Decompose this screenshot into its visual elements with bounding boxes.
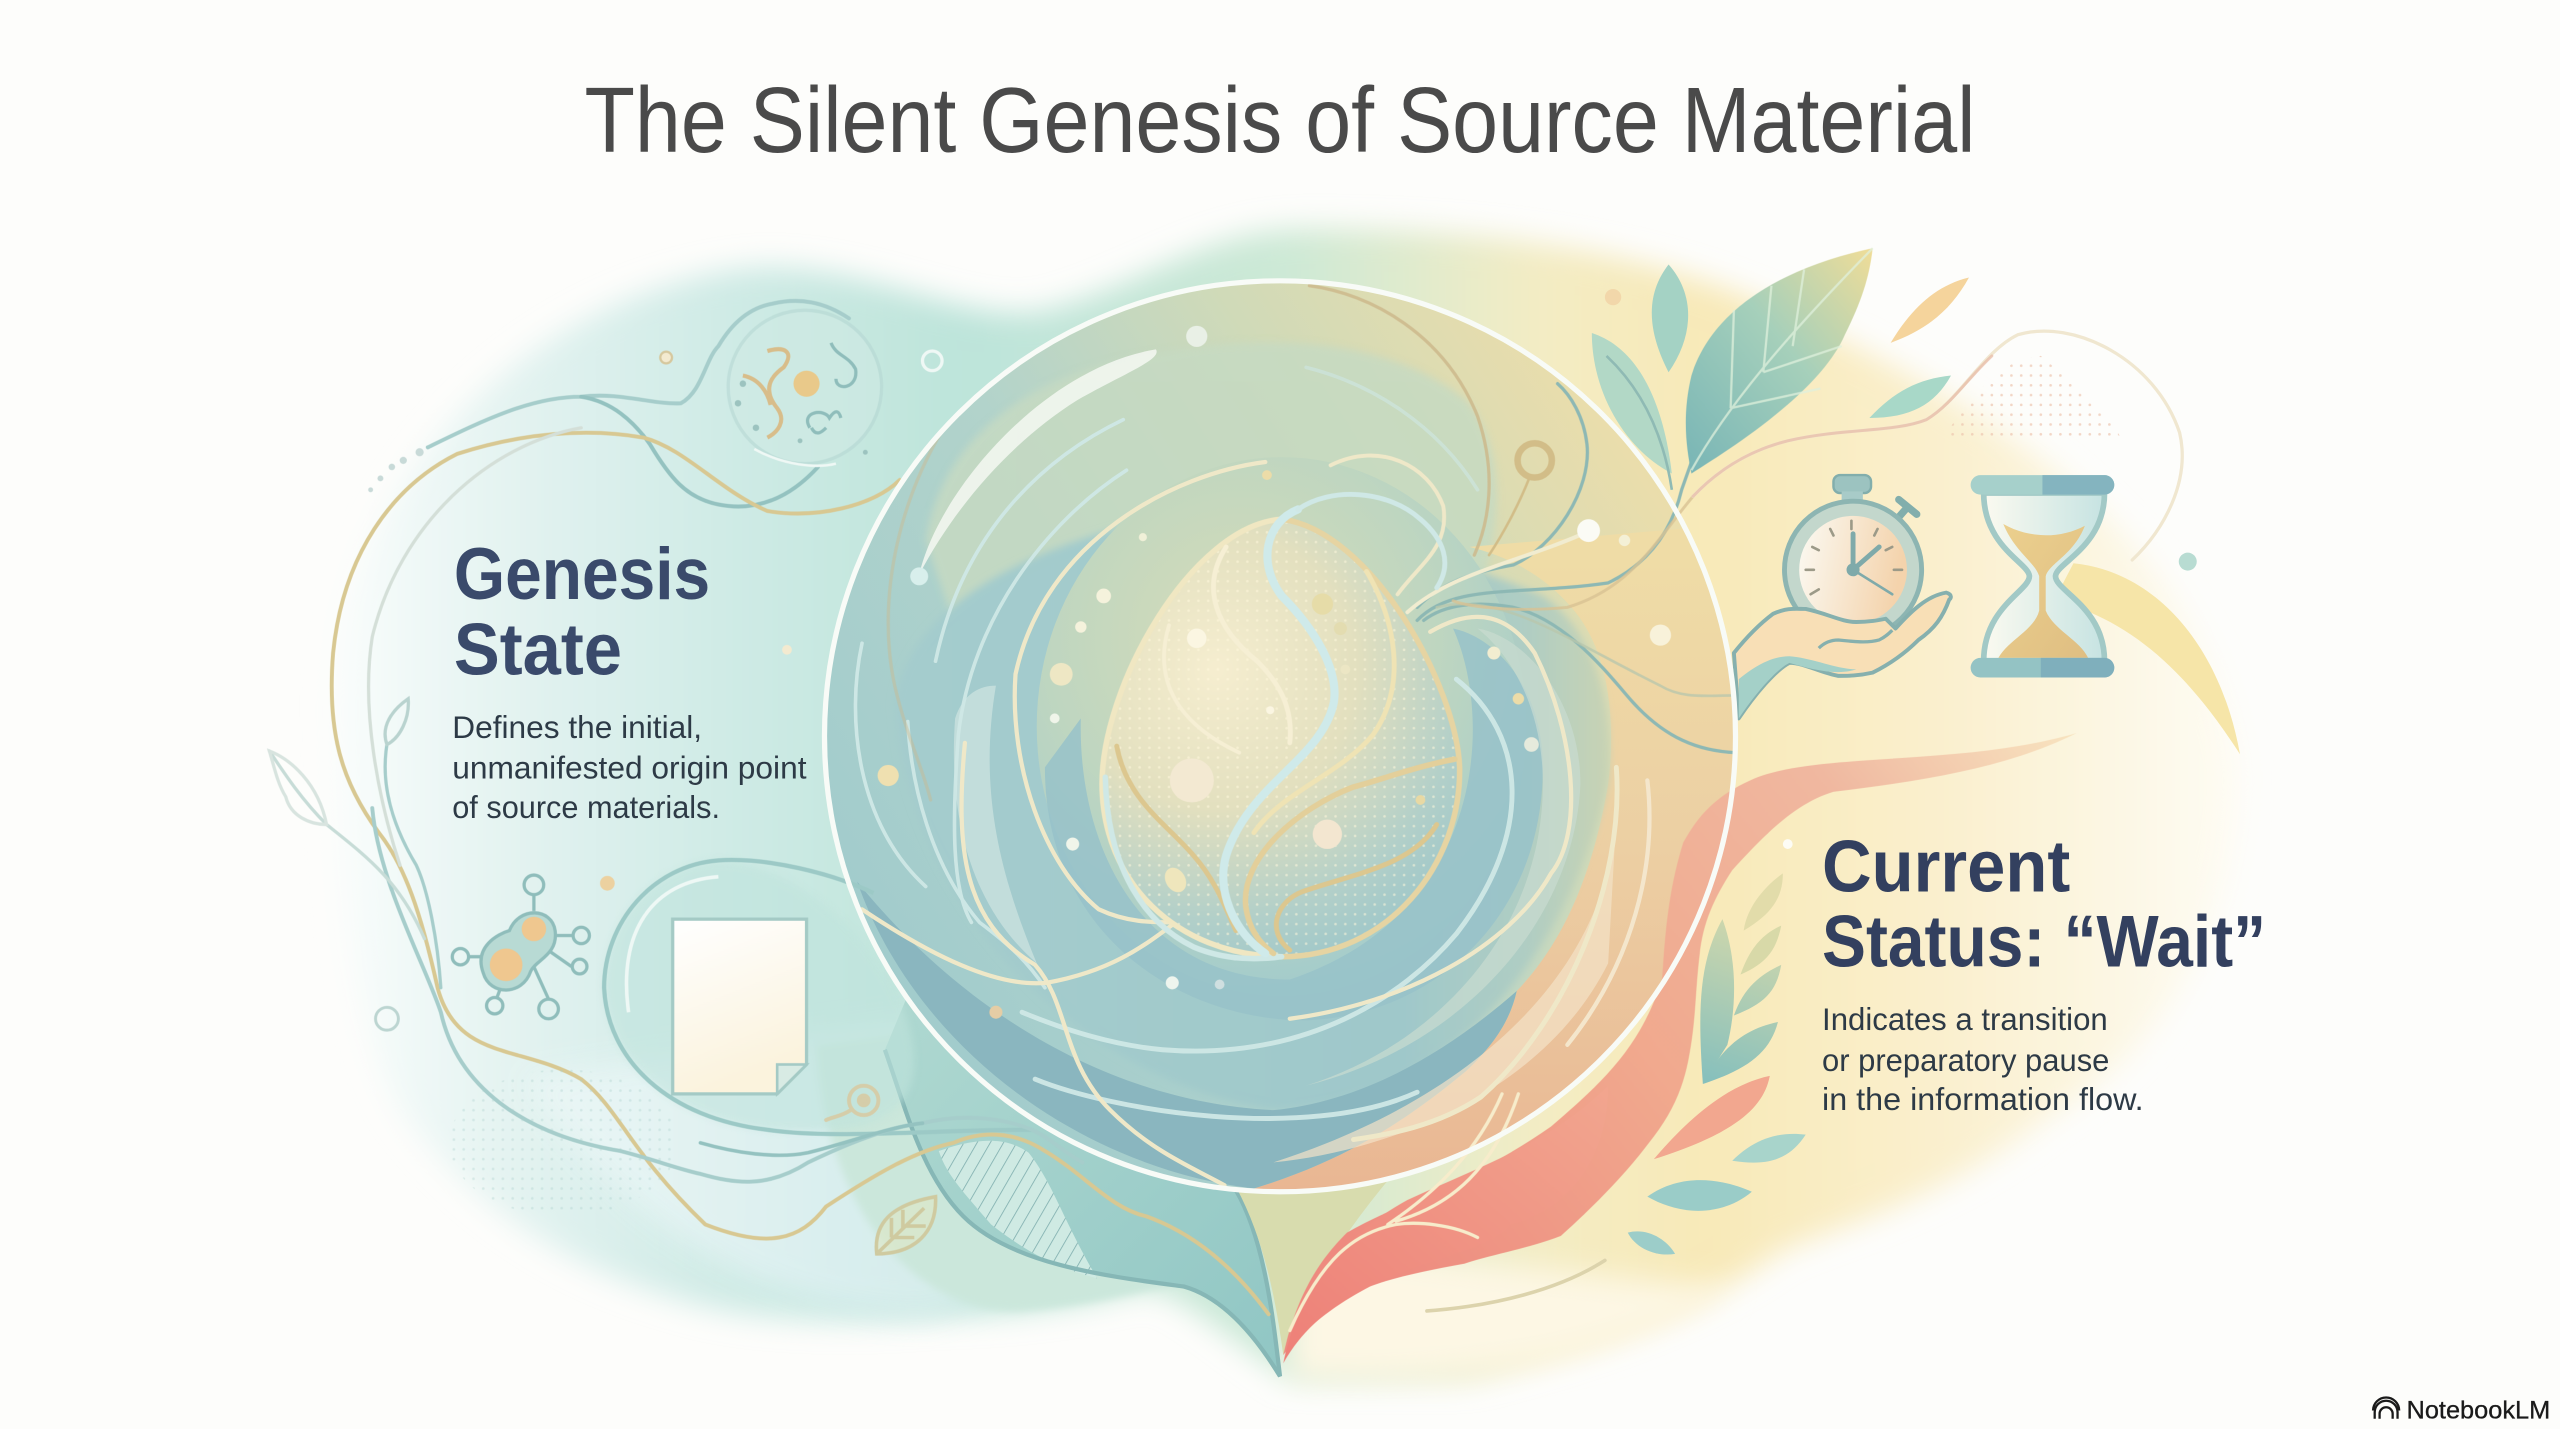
body: genesis state: Defines the initial, (452, 709, 702, 745)
crown (1833, 475, 1871, 493)
decorative flowing lines on the left (269, 301, 1269, 1314)
small tan seed icon (826, 1086, 878, 1120)
pale sage band (1306, 629, 1580, 1086)
left bottom leaf (885, 980, 1280, 1376)
hand (1734, 593, 1951, 718)
small rings top left (376, 351, 942, 1030)
teal leaf 2 (1647, 1180, 1752, 1211)
small teal leaf (1652, 264, 1688, 372)
soft colour wash background (335, 229, 2240, 1381)
bubble fill (604, 860, 914, 1131)
heading: genesis state: State (454, 607, 622, 690)
tan ring ornament (1518, 443, 1552, 478)
leaf body (885, 980, 1280, 1376)
side pusher (1896, 500, 1917, 521)
swirl lines (855, 286, 1649, 1185)
central swirl disc (824, 281, 1755, 1216)
fern and leaves lower right (1427, 839, 1806, 1311)
bottom cap (1971, 658, 2114, 678)
coral side leaf (1654, 1076, 1770, 1159)
teal swirl body (895, 519, 1610, 1110)
glass (1984, 493, 2104, 661)
body: current status: or preparatory pause (1822, 1042, 2109, 1078)
tan leaf icon (876, 1197, 936, 1254)
heading: genesis state: Genesis (454, 532, 710, 615)
white highlight crescent (919, 349, 1157, 575)
stopwatch and hand (1734, 475, 1951, 718)
light left crescent (954, 686, 1037, 963)
disc base gradient (824, 281, 1736, 1192)
left teal leaf (1592, 333, 1672, 473)
body: current status (1822, 1001, 2144, 1117)
bubble outline (604, 860, 1032, 1134)
body: current status: in the information flow. (1822, 1081, 2144, 1117)
text block: current status (1822, 824, 2266, 1117)
cream lower crescent (1274, 850, 1614, 1162)
heading: current status: Current (1822, 824, 2070, 907)
body: current status: Indicates a transition (1822, 1001, 2108, 1037)
egg stipple (1102, 519, 1461, 957)
watch hands (1806, 521, 1902, 594)
notebooklm icon (2373, 1397, 2399, 1419)
inner teal ring band (1045, 629, 1543, 1020)
large leaf veins (1691, 248, 1873, 470)
sprig bud outlines (269, 699, 408, 824)
yellow swoosh (2054, 563, 2240, 754)
dial face (1799, 516, 1907, 624)
teal leaf 3 (1628, 1231, 1675, 1255)
orange accent leaf (1891, 278, 1969, 343)
cream veins (1290, 1094, 1518, 1331)
molecule body (481, 913, 555, 990)
hourglass (1971, 475, 2114, 678)
white sparkle (1783, 839, 1793, 849)
hand sleeve (1739, 656, 1856, 718)
fern frond top (1744, 873, 1783, 931)
notebooklm wordmark: NotebookLM (2407, 1397, 2550, 1425)
egg orbs (1160, 593, 1425, 896)
title: The Silent Genesis of Source Material (584, 68, 1976, 172)
bubble highlight (626, 877, 718, 1012)
outer glass ring (824, 281, 1736, 1192)
microbe circle (728, 310, 882, 466)
leaf contour (885, 1050, 1280, 1376)
molecule icon (452, 875, 589, 1019)
inner core swirl (1036, 461, 1498, 962)
stipple texture bottom left (449, 1069, 678, 1216)
heading: current status: Status: “Wait” (1822, 899, 2266, 982)
watch case (1784, 501, 1922, 638)
teal dot (2179, 553, 2197, 571)
sand (1998, 524, 2088, 658)
ribbon: coral wave (1283, 733, 2077, 1355)
tan curve (1427, 1260, 1605, 1311)
notebooklm badge (2373, 1397, 2550, 1425)
fern stem leaf (1700, 919, 1734, 1084)
hand finger line (1819, 630, 1892, 648)
vines from the egg to the leaves (1331, 384, 1736, 753)
teal leaf 1 (1732, 1134, 1806, 1163)
egg flowing lines (1102, 494, 1460, 959)
large leaf (1686, 248, 1873, 473)
fern frond low (1703, 1022, 1778, 1084)
heading: genesis state (454, 532, 710, 690)
bottom leaf: coral petals (1283, 1086, 1608, 1363)
fern frond mid (1734, 965, 1781, 1015)
upper olive swirl (926, 344, 1498, 608)
blank page icon (673, 919, 807, 1094)
hatched leaf panel (939, 1141, 1097, 1278)
body: genesis state (452, 709, 807, 825)
floating dots around egg (878, 326, 1671, 1019)
central egg (1102, 494, 1461, 959)
body: genesis state: of source materials. (452, 789, 720, 825)
bottom leaf: centre yellow wedge (1224, 1143, 1420, 1355)
teal accent leaf (1869, 375, 1951, 418)
text block: genesis state (452, 532, 807, 825)
heading: current status (1822, 824, 2266, 982)
body: genesis state: unmanifested origin point (452, 750, 807, 786)
orange dot (1605, 289, 1621, 305)
dotted trail near top left (368, 448, 424, 492)
top cap (1971, 475, 2114, 495)
dark teal bottom band (857, 882, 1517, 1189)
leaves top right (1592, 248, 1969, 490)
faint arcs and stipple upper right (1693, 331, 2182, 560)
document bubble (604, 860, 1032, 1134)
peach lower right region (1254, 522, 1755, 1216)
fern frond upper (1740, 926, 1781, 975)
